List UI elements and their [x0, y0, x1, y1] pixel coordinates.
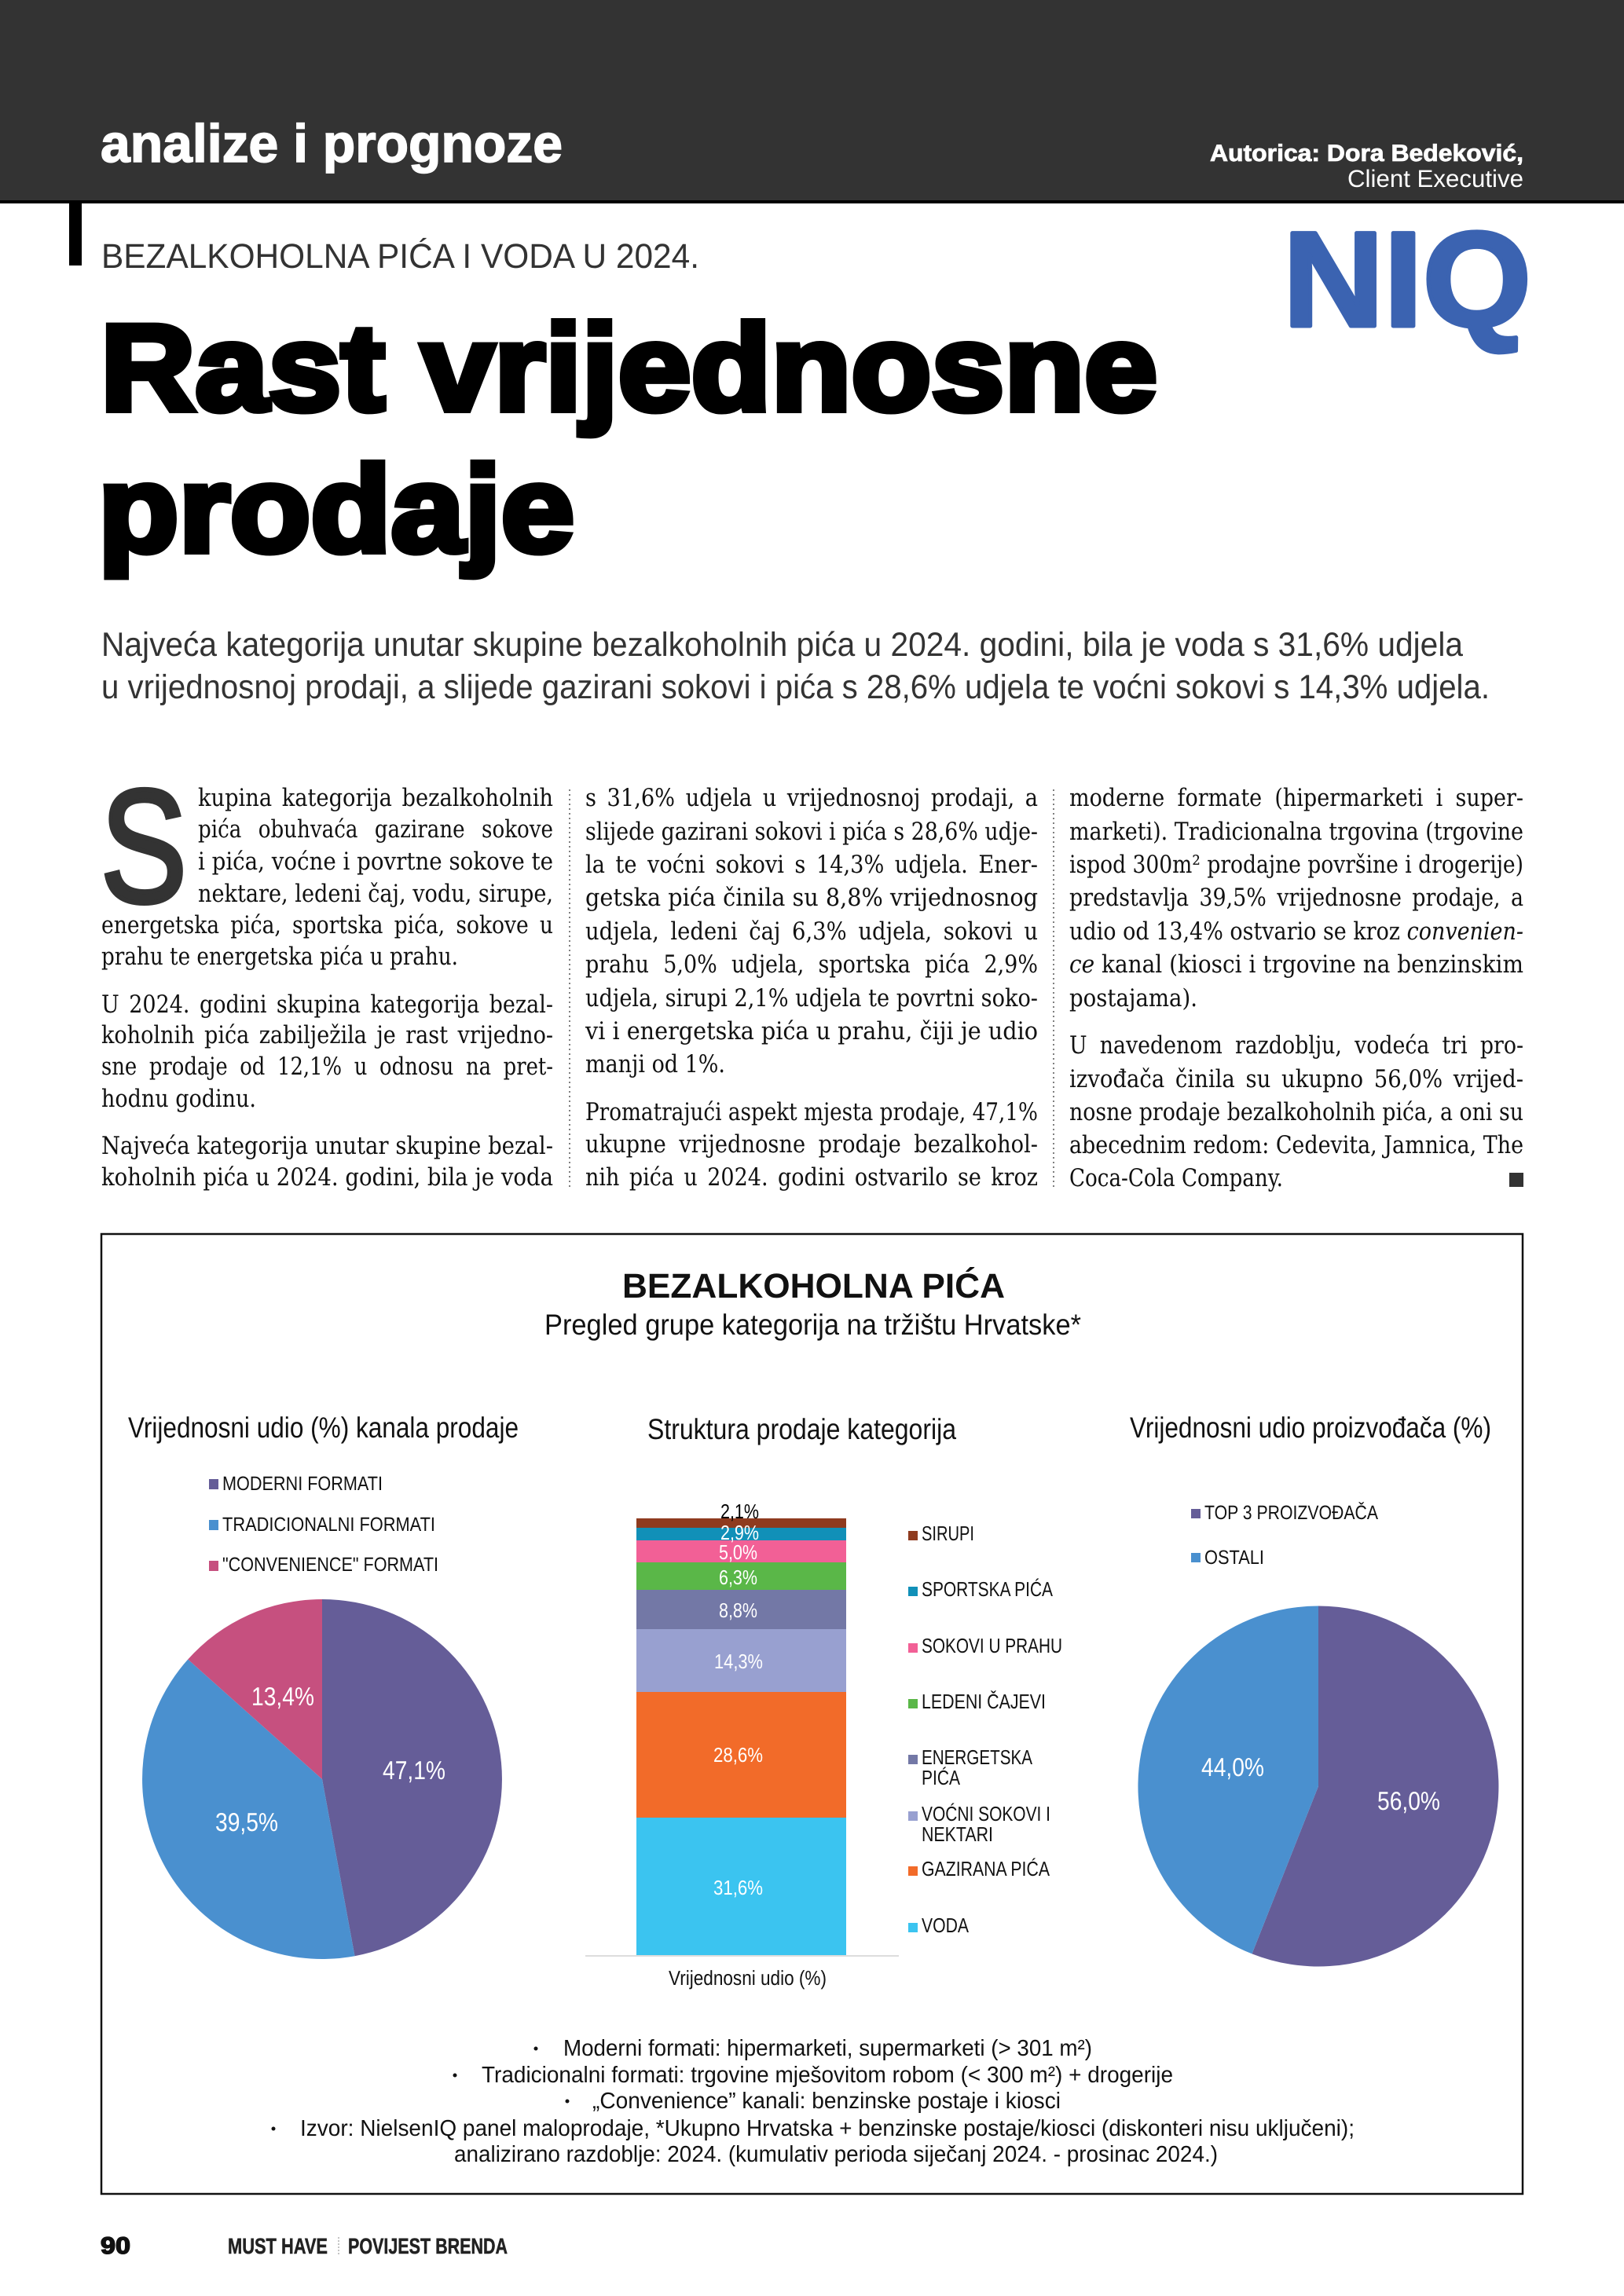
body text: column 2: manji od 1%. [585, 1050, 725, 1078]
body text: column 1: i pića, voćne i povrtne sokove te [198, 848, 553, 876]
panel subtitle: Pregled grupe kategorija na tržištu Hrvatske* [544, 1309, 1081, 1341]
logo: NIQ: NIQ [1283, 204, 1531, 355]
body text: column 1: koholnih pića zabilježila je rast vrijedno- [101, 1021, 553, 1049]
kicker: BEZALKOHOLNA PIĆA I VODA U 2024. [101, 237, 699, 276]
bar values: 6,3% [719, 1565, 757, 1589]
legend [908, 1522, 1062, 1937]
chart: category structure stacked bar [585, 1413, 1062, 1990]
body text: column 2: s 31,6% udjela u vrijednosnoj prodaji, a [585, 784, 1038, 812]
body text: column 1: U 2024. godini skupina kategorija bezal- [101, 991, 553, 1019]
pie values: 13,4% [251, 1682, 314, 1711]
body text: column 1 [101, 784, 553, 1192]
footnotes [272, 2036, 1355, 2167]
footer section label [228, 2234, 508, 2258]
body text: column 3: moderne formate (hipermarketi i super- [1069, 784, 1523, 812]
panel: chart box [101, 1234, 1523, 2194]
header band [0, 0, 1624, 203]
pie values: 44,0% [1201, 1752, 1264, 1782]
footnotes: analizirano razdoblje: 2024. (kumulativ perioda siječanj 2024. - prosinac 2024.) [454, 2142, 1218, 2167]
pie slices [1138, 1606, 1498, 1967]
legend: ENERGETSKA [922, 1745, 1033, 1769]
legend: TRADICIONALNI FORMATI [222, 1514, 435, 1536]
pie values [1201, 1752, 1440, 1815]
chart title: Vrijednosni udio (%) kanala prodaje [128, 1412, 519, 1444]
legend [1191, 1502, 1378, 1569]
body text: column 1: energetska pića, sportska pića, sokove u [101, 911, 553, 939]
main title [98, 300, 1157, 578]
author: Client Executive [1347, 165, 1523, 192]
legend: TOP 3 PROIZVOĐAČA [1204, 1502, 1378, 1524]
end mark [1509, 1173, 1523, 1187]
body text: column 3: udio od 13,4% ostvario se kroz convenien- [1069, 917, 1523, 946]
legend: NEKTARI [922, 1822, 993, 1846]
chart: manufacturers pie [1130, 1412, 1498, 1967]
body text: column 3: ispod 300m² prodajne površine i drogerije) [1069, 851, 1523, 879]
body text: column 1: sne prodaje od 12,1% u odnosu na pret- [101, 1053, 553, 1081]
body text: column 2 [585, 784, 1038, 1192]
bar values: 5,0% [719, 1540, 757, 1564]
footnotes: Izvor: NielsenIQ panel maloprodaje, *Ukupno Hrvatska + benzinske postaje/kiosci (diskonteri nisu uključeni); [300, 2116, 1355, 2141]
body text: column 1: koholnih pića u 2024. godini, bila je voda [101, 1163, 553, 1192]
footnotes: Tradicionalni formati: trgovine mješovitom robom (< 300 m²) + drogerije [482, 2063, 1173, 2088]
body text: column 3: nosne prodaje bezalkoholnih pića, a oni su [1069, 1098, 1523, 1126]
footnotes: Moderni formati: hipermarketi, supermarketi (> 301 m²) [563, 2036, 1092, 2061]
bar values: 2,9% [720, 1521, 759, 1544]
author: Autorica: Dora Bedeković, [1210, 141, 1523, 167]
intro paragraph: Najveća kategorija unutar skupine bezalkoholnih pića u 2024. godini, bila je voda s 31,6% udjela [101, 626, 1463, 664]
legend: LEDENI ČAJEVI [922, 1690, 1046, 1713]
section title: analize i prognoze [101, 114, 563, 174]
main title: Rast vrijednosne [101, 300, 1157, 437]
chart title: Vrijednosni udio proizvođača (%) [1130, 1412, 1491, 1444]
author [1210, 141, 1523, 192]
panel heading: BEZALKOHOLNA PIĆA [622, 1267, 1005, 1305]
footer section label: MUST HAVE [228, 2234, 328, 2258]
body text: column 1: nektare, ledeni čaj, vodu, sirupe, [198, 880, 553, 908]
body text: column 2: prahu 5,0% udjela, sportska pića 2,9% [585, 950, 1038, 979]
pie values [215, 1682, 445, 1836]
pie values: 47,1% [383, 1756, 445, 1785]
body text: column 3: predstavlja 39,5% vrijednosne prodaje, a [1069, 884, 1523, 912]
legend: VODA [922, 1913, 970, 1937]
body text: column 3: abecednim redom: Cedevita, Jamnica, The [1069, 1131, 1523, 1159]
footer section label: POVIJEST BRENDA [348, 2234, 508, 2258]
main title: prodaje [98, 441, 574, 578]
drop cap: S [101, 756, 187, 936]
legend [209, 1473, 438, 1576]
intro paragraph: u vrijednosnoj prodaji, a slijede gazirani sokovi i pića s 28,6% udjela te voćni sokovi s 14,3% udjela. [101, 668, 1490, 706]
chart title: Struktura prodaje kategorija [647, 1413, 956, 1445]
body text: column 2: udjela, sirupi 2,1% udjela te povrtni soko- [585, 984, 1038, 1013]
legend: MODERNI FORMATI [222, 1473, 383, 1495]
body text: column 1: kupina kategorija bezalkoholnih [198, 784, 553, 812]
legend: SPORTSKA PIĆA [922, 1577, 1054, 1601]
body text: column 2: udjela, ledeni čaj 6,3% udjela, sokovi u [585, 917, 1038, 946]
pie slices [142, 1599, 502, 1959]
body text: column 2: la te voćni sokovi s 14,3% udjela. Ener- [585, 851, 1038, 879]
body text: column 2: vi i energetska pića u prahu, čiji je udio [585, 1017, 1038, 1045]
bar values: 28,6% [713, 1743, 763, 1767]
legend: "CONVENIENCE" FORMATI [222, 1554, 438, 1576]
chart: sales channels pie [128, 1412, 519, 1959]
body text: column 2: slijede gazirani sokovi i pića s 28,6% udje- [585, 818, 1038, 846]
bar values: 8,8% [719, 1598, 757, 1622]
body text: column 3: Coca-Cola Company. [1069, 1164, 1283, 1192]
intro paragraph [101, 626, 1490, 706]
body text: column 3: U navedenom razdoblju, vodeća tri pro- [1069, 1031, 1523, 1060]
body text: column 1: hodnu godinu. [101, 1085, 256, 1113]
body text: column 1: Najveća kategorija unutar skupine bezal- [101, 1132, 553, 1160]
bar values: 31,6% [713, 1876, 763, 1899]
body text: column 3: postajama). [1069, 984, 1197, 1013]
legend: OSTALI [1204, 1547, 1264, 1569]
legend: VOĆNI SOKOVI I [922, 1802, 1050, 1825]
body text: column 1: prahu te energetska pića u prahu. [101, 943, 458, 971]
bar segments [585, 1518, 899, 1957]
body text: column 3: ce kanal (kiosci i trgovine na benzinskim [1069, 950, 1523, 979]
axis label: Vrijednosni udio (%) [669, 1966, 827, 1990]
legend: SOKOVI U PRAHU [922, 1634, 1062, 1657]
body text: column 2: getska pića činila su 8,8% vrijednosnog [585, 884, 1038, 912]
legend: PIĆA [922, 1766, 961, 1789]
body text: column 2: ukupne vrijednosne prodaje bezalkohol- [585, 1130, 1038, 1159]
body text: column 1: pića obuhvaća gazirane sokove [198, 815, 553, 844]
kicker accent bar [69, 202, 82, 265]
body text: column 2: Promatrajući aspekt mjesta prodaje, 47,1% [585, 1098, 1038, 1126]
bar values [713, 1500, 763, 1899]
bar values: 14,3% [714, 1650, 763, 1673]
bar values: 2,1% [720, 1500, 759, 1523]
footnotes: „Convenience” kanali: benzinske postaje i kiosci [592, 2089, 1061, 2114]
page number: 90 [101, 2233, 130, 2259]
legend: GAZIRANA PIĆA [922, 1857, 1050, 1880]
legend: SIRUPI [922, 1522, 974, 1545]
body text: column 2: nih pića u 2024. godini ostvarilo se kroz [585, 1163, 1038, 1192]
pie values: 56,0% [1377, 1786, 1440, 1815]
pie values: 39,5% [215, 1807, 278, 1836]
body text: column 3 [1069, 784, 1523, 1192]
body text: column 3: marketi). Tradicionalna trgovina (trgovine [1069, 818, 1523, 846]
body text: column 3: izvođača činila su ukupno 56,0% vrijed- [1069, 1065, 1523, 1093]
